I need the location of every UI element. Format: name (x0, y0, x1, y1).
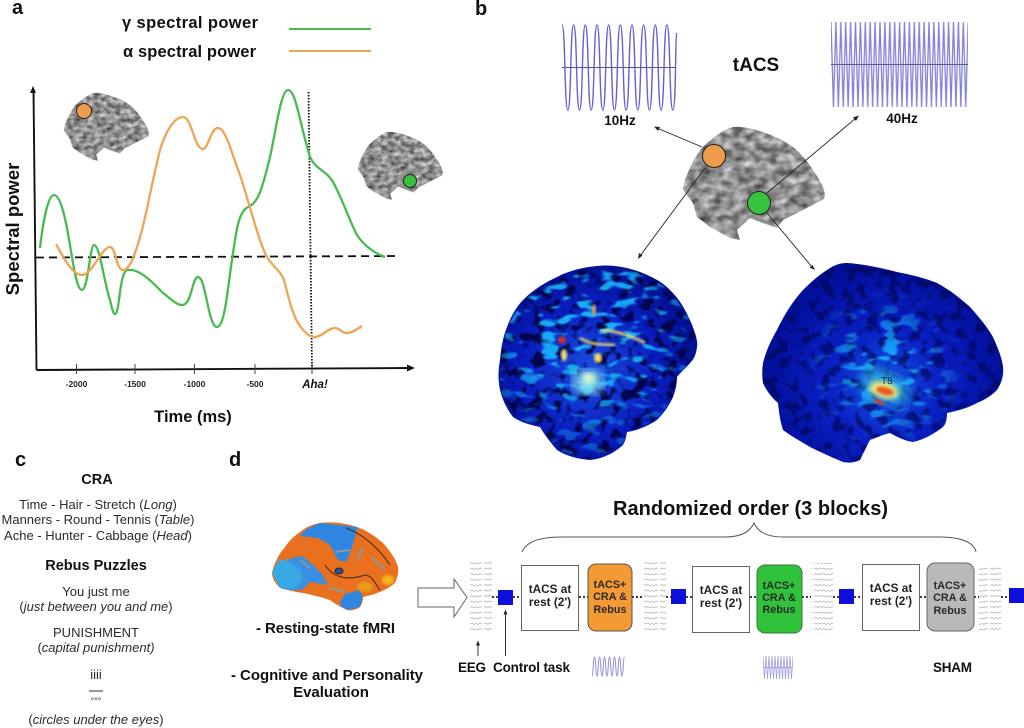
small 40Hz waveform (763, 656, 793, 679)
block 1: orange stimulation: tACS+ (594, 579, 626, 591)
axis title: spectral power: Spectral power (2, 163, 23, 295)
panel c: task examples (2, 449, 194, 727)
label d: d (229, 449, 241, 471)
block 2: green stimulation: Rebus (762, 604, 796, 616)
block 2: tACS at rest: rest (2') (700, 596, 742, 610)
x axis tick labels: -500 (246, 379, 264, 389)
block 1: orange stimulation: Rebus (594, 604, 626, 616)
panel a: spectral power chart (2, 0, 443, 426)
CRA examples: Ache - Hunter - Cabbage (Head) (4, 528, 192, 543)
EEG traces (470, 562, 1001, 634)
legend (122, 14, 371, 61)
Rebus examples (19, 584, 173, 727)
10Hz label: 10Hz (604, 113, 636, 128)
block 3: tACS at rest: tACS at (870, 581, 912, 595)
electric field brain: left (498, 266, 698, 460)
EEG label and arrow (458, 640, 486, 675)
sham label: SHAM (933, 660, 972, 675)
electric field brain: right (760, 260, 1006, 465)
cognitive evaluation label: Evaluation (293, 684, 369, 701)
Rebus examples: You just me (62, 584, 130, 599)
legend: α spectral power (123, 43, 257, 61)
resting-state label: - Resting-state fMRI (256, 620, 395, 637)
gamma curve (40, 90, 385, 327)
x axis tick labels: -1500 (124, 379, 146, 389)
dotted connectors (492, 596, 1009, 598)
aha marker dotted line (308, 92, 312, 369)
brace (522, 523, 976, 552)
block 2: green stimulation (757, 565, 802, 633)
40Hz label: 40Hz (886, 111, 918, 126)
control task label and arrow (493, 610, 570, 675)
block 3: sham stimulation (927, 563, 974, 631)
block 3: tACS at rest (862, 564, 920, 630)
icon: brain with green site (358, 132, 443, 200)
EEG label and arrow: EEG (458, 660, 486, 675)
CRA examples (2, 497, 194, 543)
Rebus examples: PUNISHMENT (53, 625, 139, 640)
x axis tick labels: -2000 (66, 379, 88, 389)
Rebus examples: (capital punishment) (37, 640, 155, 655)
axes (30, 86, 415, 374)
Rebus examples: (circles under the eyes) (28, 712, 164, 727)
block 3: tACS at rest: rest (2') (870, 594, 912, 608)
green stimulation site (748, 192, 770, 214)
hollow arrow (418, 579, 467, 617)
block 1: orange stimulation (588, 564, 632, 631)
icon: central brain (683, 127, 825, 240)
block 1: tACS at rest: tACS at (529, 582, 571, 596)
x axis tick labels (66, 379, 328, 391)
block 3: sham stimulation: tACS+ (934, 580, 966, 592)
icon: resting-state fMRI brain (266, 521, 398, 612)
orange stimulation site (702, 144, 726, 168)
icon: brain with orange site (64, 93, 149, 161)
control task blocks (498, 588, 1024, 605)
legend: γ spectral power (122, 14, 259, 32)
40Hz waveform (831, 22, 968, 107)
arrows from stimulation sites (638, 116, 859, 270)
CRA heading: CRA (81, 472, 113, 488)
block 2: green stimulation: CRA & (762, 592, 796, 604)
CRA examples: Time - Hair - Stretch (Long) (19, 497, 177, 512)
baseline dashed line (36, 256, 400, 258)
block 1: tACS at rest: rest (2') (529, 595, 571, 609)
10Hz waveform (562, 25, 677, 110)
block 2: tACS at rest: tACS at (700, 583, 742, 597)
block 1: tACS at rest (522, 566, 578, 630)
heading: randomized order: Randomized order (3 blocks) (613, 498, 888, 520)
Rebus heading: Rebus Puzzles (45, 558, 147, 574)
Rebus examples: (just between you and me) (19, 599, 173, 614)
small 10Hz waveform (592, 657, 624, 676)
block 2: tACS at rest (692, 566, 750, 632)
CRA examples: Manners - Round - Tennis (Table) (2, 512, 194, 527)
label c: c (15, 449, 26, 471)
heading tACS: tACS (733, 55, 779, 76)
Rebus examples: °°° (91, 696, 102, 706)
electrode label T8: T8 (881, 376, 893, 387)
panel d: protocol (229, 449, 1024, 701)
alpha curve (56, 117, 362, 337)
control task label and arrow: Control task (493, 660, 570, 675)
block 3: sham stimulation: CRA & (933, 592, 967, 604)
Rebus examples: iiii (90, 667, 102, 682)
cognitive evaluation label (231, 667, 424, 701)
x axis tick labels: -1000 (184, 379, 206, 389)
axis title: time: Time (ms) (154, 408, 232, 426)
x axis tick labels: Aha! (301, 379, 328, 391)
block 3: sham stimulation: Rebus (934, 605, 966, 617)
block 2: green stimulation: tACS+ (763, 580, 795, 592)
cognitive evaluation label: - Cognitive and Personality (231, 667, 424, 684)
block 1: orange stimulation: CRA & (593, 591, 627, 603)
panel b: tACS montage (475, 0, 1006, 465)
